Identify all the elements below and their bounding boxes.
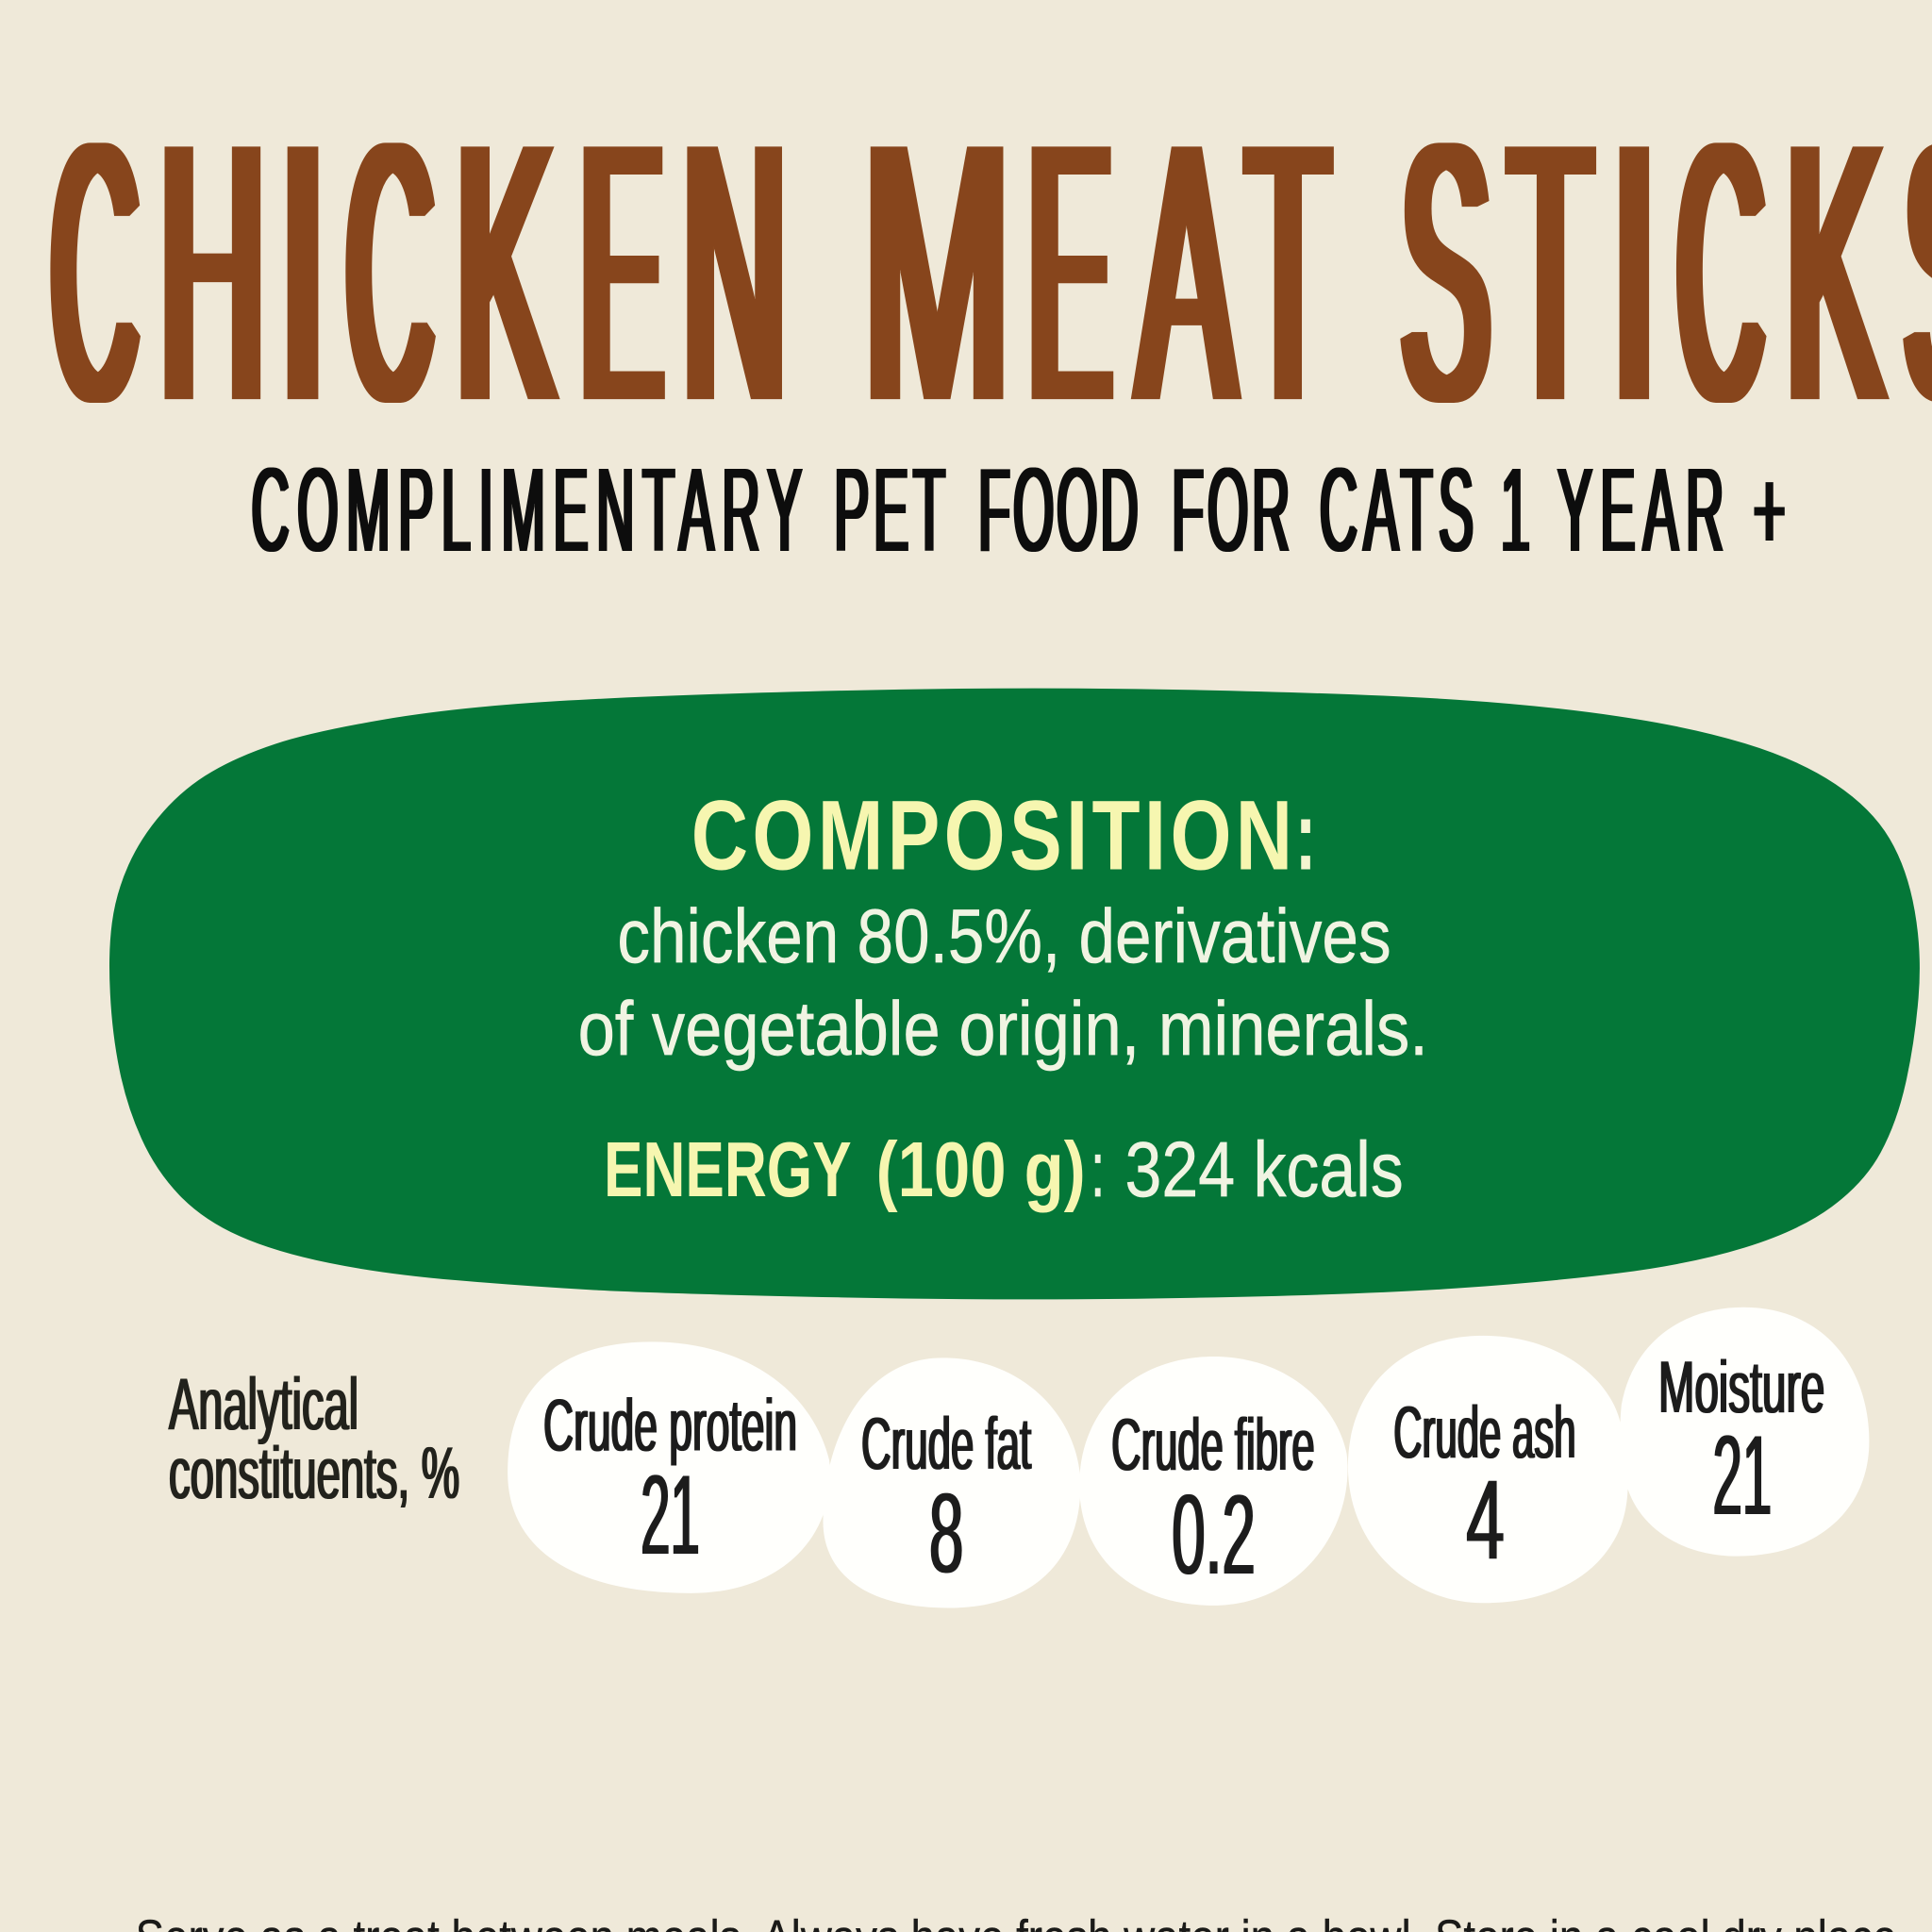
title [52,66,1932,478]
analytical constituents label: Analytical [169,1362,358,1445]
energy line: (100 g) [876,1127,1086,1213]
subtitle: 1 [1501,442,1530,576]
analytical constituents label: constituents, % [169,1431,459,1514]
green blob background [109,689,1920,1299]
constituent: crude fibre: 0.2 [1172,1472,1256,1598]
subtitle: PET [834,442,945,576]
title: C [52,68,138,478]
constituent: crude fibre: Crude fibre [1111,1403,1315,1486]
constituent: crude fat: 8 [929,1471,963,1597]
title: C [1678,68,1763,478]
title: C [347,68,433,478]
title: E [1029,67,1111,477]
composition heading: COMPOSITION [691,781,1292,891]
energy line [604,1127,1404,1213]
composition text [578,894,1428,1072]
subtitle [251,442,1786,576]
title: K [1787,67,1884,477]
constituent: moisture [1620,1307,1869,1557]
title: K [457,67,554,477]
title: A [1138,67,1235,477]
subtitle: FOR [1172,442,1290,576]
constituent: crude fat: Crude fat [861,1402,1031,1485]
energy line: : [1091,1127,1106,1213]
constituent: crude protein: Crude protein [543,1383,797,1466]
constituent: crude fibre [1079,1357,1348,1606]
constituent: crude ash [1348,1336,1628,1603]
title: S [1402,66,1490,477]
energy line: ENERGY [604,1127,852,1213]
subtitle: + [1754,442,1786,576]
constituent: crude protein: 21 [641,1452,700,1578]
constituent: crude ash: Crude ash [1393,1391,1576,1474]
composition text: chicken 80.5%, derivatives [617,894,1391,979]
constituent: crude fat [823,1357,1080,1607]
subtitle: CATS [1320,442,1474,576]
subtitle: COMPLIMENTARY [251,442,802,576]
constituent: crude protein [508,1341,830,1593]
title: N [683,67,786,477]
title: T [1509,69,1591,478]
subtitle: YEAR [1557,442,1724,576]
analytical constituents label [169,1362,459,1514]
title: E [581,68,662,477]
constituent: crude ash: 4 [1466,1457,1505,1583]
subtitle: FOOD [978,442,1139,576]
title: T [1247,69,1329,478]
composition heading: : [1295,780,1316,891]
title: I [1612,68,1656,477]
title: I [279,69,326,478]
constituent: moisture: 21 [1713,1412,1772,1539]
energy line: 324 kcals [1124,1127,1404,1213]
title: M [863,67,1010,477]
composition text: of vegetable origin, minerals. [578,987,1428,1072]
panel: composition [109,689,1920,1299]
title: H [160,67,265,477]
